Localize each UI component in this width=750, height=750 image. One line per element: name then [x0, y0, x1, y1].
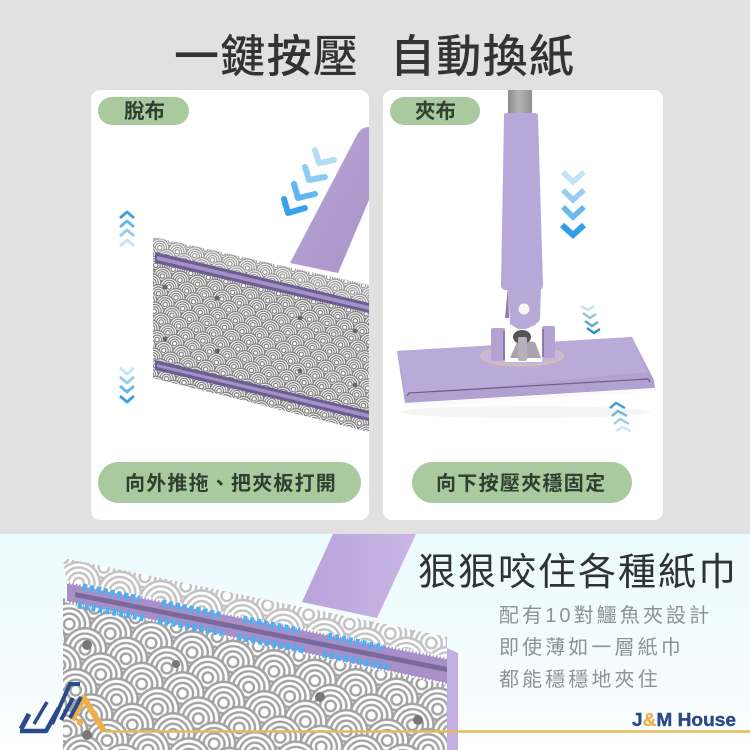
description text: 即使薄如一層紙巾	[499, 636, 684, 659]
tag: 脫布: 脫布	[124, 100, 165, 123]
brand name: J&M House	[632, 710, 736, 730]
mop handle	[290, 127, 369, 273]
gold footer line	[105, 730, 750, 733]
panel: clamp cloth	[383, 90, 663, 520]
mop shadow	[400, 406, 650, 418]
caption: press down: 向下按壓夾穩固定	[436, 471, 606, 495]
logo	[20, 684, 104, 731]
mop flat head	[397, 337, 656, 407]
mop handle close-up	[302, 534, 416, 618]
tag: 脫布	[98, 97, 189, 125]
description text: 配有10對鱷魚夾設計	[499, 604, 712, 627]
arrows: large down	[562, 172, 584, 235]
blue teeth highlight	[78, 587, 388, 667]
purple side of pad	[447, 648, 458, 750]
tag: 夾布: 夾布	[415, 100, 456, 123]
title	[174, 31, 575, 82]
arrows: diagonal push	[284, 150, 334, 213]
caption: push outward	[98, 462, 361, 503]
arrows: small down	[581, 306, 600, 333]
arrows: small up	[610, 403, 631, 431]
mop joint	[491, 325, 555, 362]
panel: bottom detail	[0, 534, 750, 750]
title: 一鍵按壓	[174, 31, 359, 82]
caption: push outward: 向外推拖、把夾板打開	[125, 472, 337, 495]
heading: 狠狠咬住各種紙巾	[418, 552, 738, 594]
arrows: up	[120, 212, 134, 246]
description text	[499, 604, 712, 691]
caption: press down	[412, 462, 632, 503]
panel: remove cloth	[91, 90, 369, 520]
description text: 都能穩穩地夾住	[499, 668, 661, 691]
tag: 夾布	[390, 97, 480, 125]
title: 自動換紙	[390, 31, 575, 82]
pad close-up	[63, 558, 447, 750]
page background	[0, 0, 750, 534]
mop pad underside	[153, 237, 369, 432]
mop steel pole	[508, 90, 532, 113]
mop handle sleeve	[501, 113, 543, 329]
arrows: down	[120, 368, 134, 402]
